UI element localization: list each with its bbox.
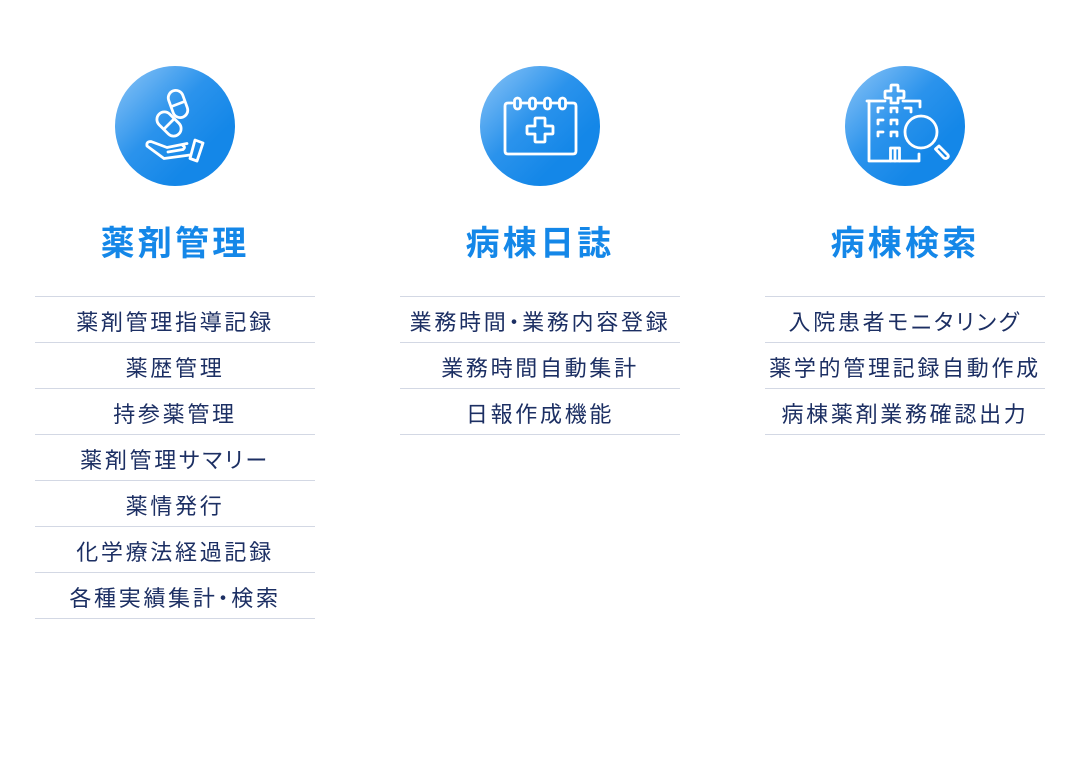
feature list: 薬情発行 xyxy=(126,494,224,519)
feature list xyxy=(400,296,680,435)
heading: 薬剤管理 xyxy=(101,225,249,263)
feature list: 持参薬管理 xyxy=(113,402,237,427)
heading: 病棟日誌 xyxy=(466,225,614,263)
feature list: 病棟薬剤業務確認出力 xyxy=(781,402,1028,427)
panel: 薬剤管理 xyxy=(35,66,315,619)
feature list: 各種実績集計・検索 xyxy=(69,586,281,611)
heading: 病棟検索 xyxy=(831,225,979,263)
icon: pills above hand xyxy=(115,66,235,186)
feature list: 化学療法経過記録 xyxy=(76,540,274,565)
icon: hospital with magnifier xyxy=(845,66,965,186)
icon: calendar with cross xyxy=(480,66,600,186)
feature list xyxy=(35,296,315,619)
feature list: 薬剤管理サマリー xyxy=(80,448,270,473)
panel: 病棟検索 xyxy=(765,66,1045,435)
panel: 病棟日誌 xyxy=(400,66,680,435)
feature list xyxy=(765,296,1045,435)
feature list: 薬学的管理記録自動作成 xyxy=(769,356,1041,381)
feature list: 業務時間・業務内容登録 xyxy=(410,310,670,335)
feature list: 薬剤管理指導記録 xyxy=(76,310,274,335)
feature list: 業務時間自動集計 xyxy=(441,356,639,381)
feature list: 日報作成機能 xyxy=(466,402,614,427)
feature list: 入院患者モニタリング xyxy=(789,310,1021,335)
feature list: 薬歴管理 xyxy=(126,356,224,381)
